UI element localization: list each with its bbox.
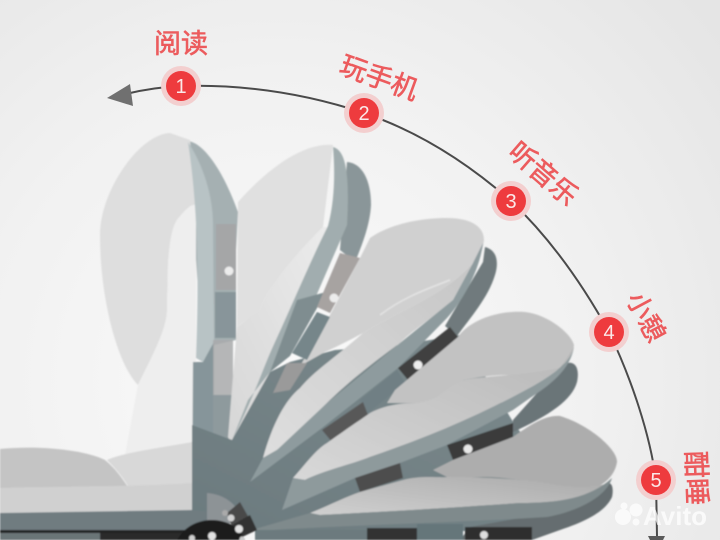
arrow: upper left	[107, 84, 133, 106]
label: short rest: 小憩	[621, 287, 671, 347]
seat position 2: slight recline	[228, 145, 371, 446]
fan underlay: teal side fabric converging at hinge	[192, 335, 575, 531]
seat position 3: mid recline	[250, 218, 497, 482]
progress arc	[118, 86, 657, 536]
step 5 marker	[636, 460, 676, 500]
step 2 marker	[344, 93, 384, 133]
flat base cushion on left	[0, 442, 215, 540]
watermark: Avito: Avito	[643, 501, 707, 531]
step 4 marker	[589, 312, 629, 352]
frame bars of position 2	[273, 253, 360, 393]
arrow: lower right	[648, 536, 665, 540]
step 3 marker: 3	[505, 191, 517, 213]
step 3 marker	[491, 181, 531, 221]
seat position 1: upright	[100, 133, 238, 512]
step 1 marker: 1	[175, 76, 187, 98]
seat position 4: deep recline	[282, 312, 578, 510]
label: deep sleep: 酣睡	[680, 450, 712, 506]
watermark: Avito	[615, 501, 707, 531]
seat illustration: five recline positions	[0, 133, 617, 540]
label: playing phone: 玩手机	[336, 50, 422, 106]
step 4 marker: 4	[603, 322, 615, 344]
label: reading: 阅读	[154, 29, 208, 59]
label: listening to music: 听音乐	[503, 136, 583, 212]
step 1 marker	[161, 66, 201, 106]
hinge mechanism	[177, 493, 257, 540]
step 2 marker: 2	[358, 103, 370, 125]
step 5 marker: 5	[650, 470, 662, 492]
seat position 5: flat	[255, 416, 617, 540]
